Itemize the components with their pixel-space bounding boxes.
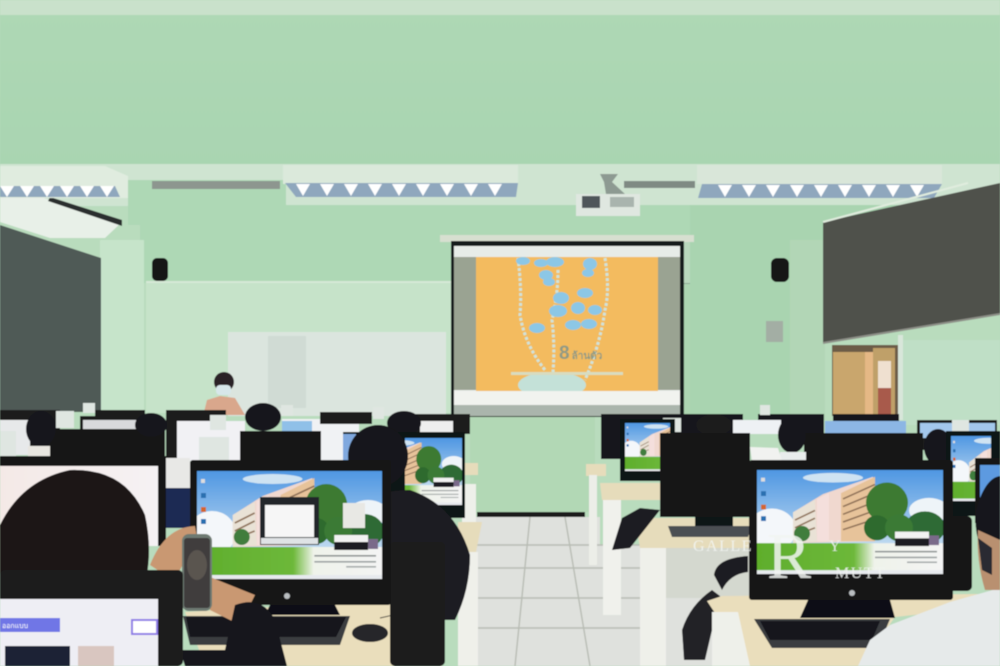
student: long dark hair, front left xyxy=(0,470,149,600)
student hand and phone xyxy=(150,526,287,666)
watermark xyxy=(693,520,886,593)
monitor: centre-left with wallpaper xyxy=(343,432,466,518)
person in black: centre-left xyxy=(348,425,470,620)
open window on screen xyxy=(260,497,319,545)
ceiling light: recessed right xyxy=(624,181,695,188)
floor xyxy=(470,512,770,666)
on-screen toolbar xyxy=(0,618,157,634)
chair: right xyxy=(945,516,972,591)
whiteboard xyxy=(228,332,446,416)
desk: front right xyxy=(707,594,978,666)
curtain: right window xyxy=(823,183,1000,343)
air conditioner xyxy=(0,197,122,238)
monitor: front right xyxy=(748,460,953,618)
slide text: 8 million: 8ล้านตัว xyxy=(559,343,603,364)
chairs: right centre xyxy=(612,508,748,660)
door xyxy=(832,335,903,420)
watermark: Y xyxy=(829,538,841,555)
monitor: right back row with wallpaper xyxy=(620,419,704,481)
curtain: left window xyxy=(0,225,101,412)
ceiling light: recessed left xyxy=(152,181,280,189)
projector xyxy=(576,174,640,216)
monitor back: right centre xyxy=(660,433,782,537)
monitor: far right pair xyxy=(946,431,1000,523)
speaker: right xyxy=(771,258,789,282)
keyboard: front right xyxy=(754,619,890,648)
back row: black monitor backs xyxy=(50,429,923,461)
monitor: far left middle xyxy=(0,456,166,546)
presenter xyxy=(204,372,245,415)
desk: front left xyxy=(185,598,442,666)
side desks xyxy=(458,463,756,666)
students: back row heads xyxy=(26,403,952,528)
speaker: left xyxy=(152,258,168,281)
watermark: MUTT xyxy=(835,565,886,582)
ceiling light: centre xyxy=(283,165,518,197)
keyboard: front left xyxy=(183,616,350,645)
watermark: R xyxy=(767,520,811,593)
back row: left monitors xyxy=(0,403,470,464)
projection screen xyxy=(440,235,694,417)
chair: centre-left xyxy=(390,542,445,666)
watermark: GALLE xyxy=(693,538,753,555)
on-screen toolbar: ออกแบบ xyxy=(2,623,28,630)
ceiling light: right xyxy=(697,165,942,198)
mouse xyxy=(352,624,388,642)
monitor: front left with window xyxy=(188,460,391,615)
back row: monitor labels xyxy=(0,431,229,461)
monitor: bottom left xyxy=(0,570,183,666)
ceiling light: left xyxy=(0,166,128,198)
student: white shirt, front right xyxy=(858,476,1000,666)
slide: orange picture xyxy=(476,257,658,398)
wall switch box xyxy=(766,321,783,342)
back row: right monitors xyxy=(601,405,997,459)
